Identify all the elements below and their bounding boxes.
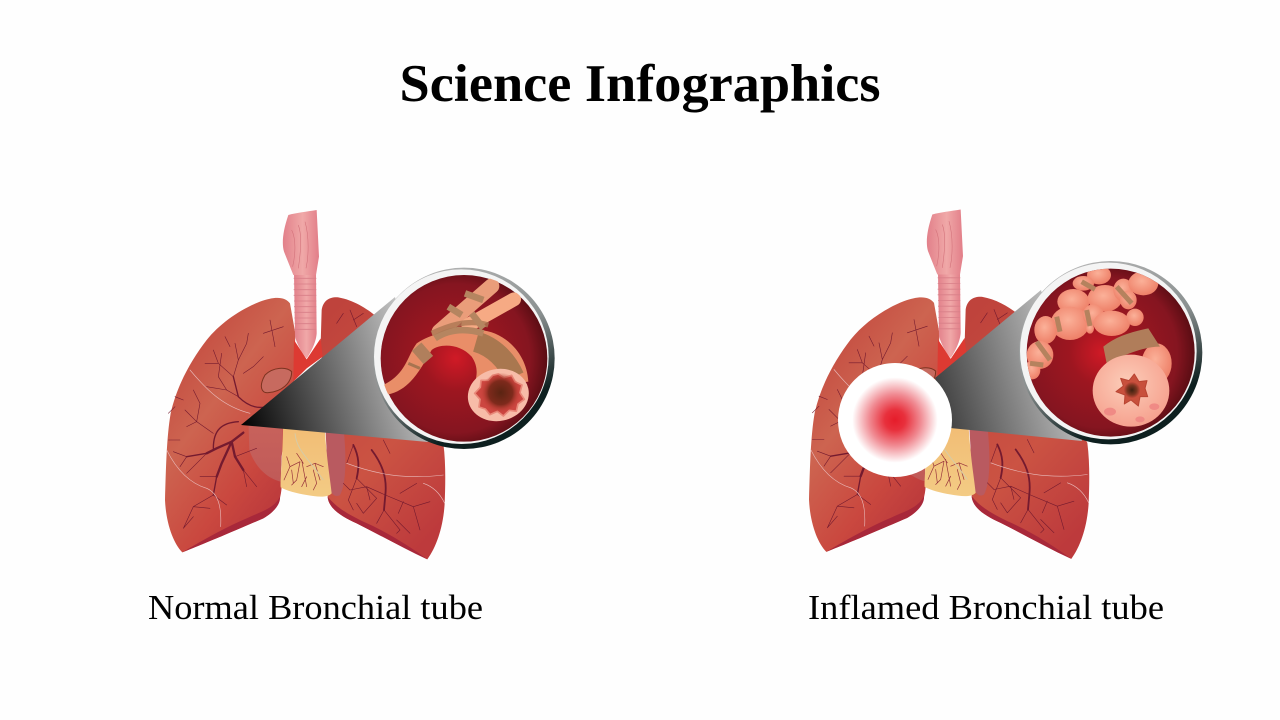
lungs: inflamed [809, 209, 1089, 559]
label: normal bronchial tube: Normal Bronchial tube [148, 588, 483, 627]
lungs: normal [165, 210, 445, 559]
inflammation marker [838, 363, 952, 477]
magnifier circle: inflamed bronchial tube [1019, 261, 1202, 444]
magnifier cone: inflamed [935, 290, 1082, 441]
illustration: normal lungs [165, 210, 555, 559]
title: Science Infographics [400, 55, 880, 113]
illustration: inflamed lungs [809, 209, 1202, 559]
label: inflamed bronchial tube: Inflamed Bronchial tube [808, 588, 1164, 627]
magnifier circle: normal bronchial tube [373, 268, 555, 449]
magnifier cone: normal [241, 297, 428, 442]
